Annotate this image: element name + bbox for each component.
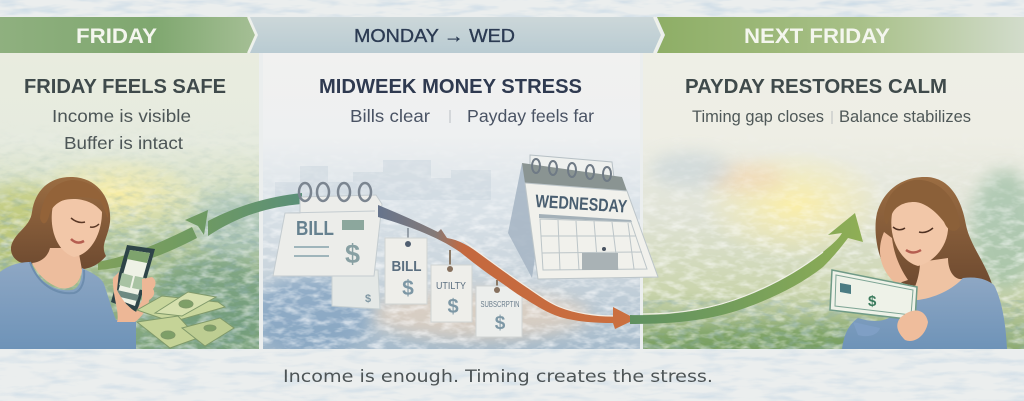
woman with check — [830, 177, 1007, 349]
header: next friday — [657, 17, 1024, 53]
closed eyes and mouth — [893, 227, 933, 232]
subscription tag — [476, 280, 522, 337]
header: monday to wed — [250, 17, 662, 53]
text: friday: Buffer is intact — [64, 133, 183, 153]
text: friday: Income is visible — [52, 106, 191, 126]
face — [891, 202, 948, 266]
text: midweek: MIDWEEK MONEY STRESS — [319, 76, 582, 98]
wednesday calendar — [508, 155, 658, 279]
header: next friday: NEXT FRIDAY — [744, 25, 890, 48]
stub calendar behind: $ — [365, 293, 371, 305]
text: friday — [24, 76, 226, 153]
header: monday to wed: MONDAY → WED — [354, 26, 515, 46]
arrow: rising to next friday — [630, 213, 863, 324]
stub calendar behind — [332, 270, 380, 309]
panel: midweek — [263, 160, 640, 349]
bill calendar: $ — [345, 239, 360, 269]
hand on face — [880, 232, 908, 284]
utility tag: $ — [447, 296, 459, 318]
hand on check — [897, 311, 928, 341]
bill tag: BILL — [392, 258, 422, 275]
subscription tag: $ — [495, 313, 506, 334]
neck — [32, 248, 82, 288]
closed eyes and mouth — [71, 218, 99, 227]
utility tag — [431, 250, 472, 322]
text: next friday: PAYDAY RESTORES CALM — [685, 76, 947, 98]
bill tag — [385, 228, 427, 304]
hair — [11, 177, 110, 269]
hair — [876, 177, 992, 286]
text: midweek — [319, 76, 594, 126]
bill calendar — [273, 183, 382, 276]
text: friday: FRIDAY FEELS SAFE — [24, 76, 226, 98]
footer line: Income is enough. Timing creates the stress. — [283, 367, 713, 387]
subscription tag: SUBSCRPTIN — [480, 300, 520, 309]
arrow: falling through midweek — [378, 205, 636, 329]
text: next friday — [685, 76, 971, 126]
arrow: rising from friday — [98, 193, 302, 270]
text: midweek: Bills clear — [350, 106, 430, 126]
sweater — [0, 262, 136, 349]
phone — [111, 245, 155, 312]
text: next friday: Balance stabilizes — [839, 108, 971, 126]
wednesday calendar: WEDNESDAY — [535, 191, 628, 217]
hand — [113, 272, 156, 322]
text: next friday: Timing gap closes — [692, 108, 824, 126]
neck — [908, 258, 962, 300]
woman with phone — [0, 177, 156, 349]
check — [830, 270, 917, 320]
face — [52, 199, 102, 257]
panel: friday — [0, 53, 275, 349]
sweater — [842, 277, 1007, 349]
bill calendar: BILL — [296, 218, 334, 240]
bill tag: $ — [402, 277, 414, 300]
check: $ — [868, 293, 877, 310]
panel: next friday — [643, 56, 1024, 349]
money pile — [137, 292, 234, 348]
header: friday: FRIDAY — [76, 25, 157, 48]
text: midweek: Payday feels far — [467, 106, 594, 126]
header: friday — [0, 17, 256, 53]
utility tag: UTILTY — [436, 281, 466, 292]
